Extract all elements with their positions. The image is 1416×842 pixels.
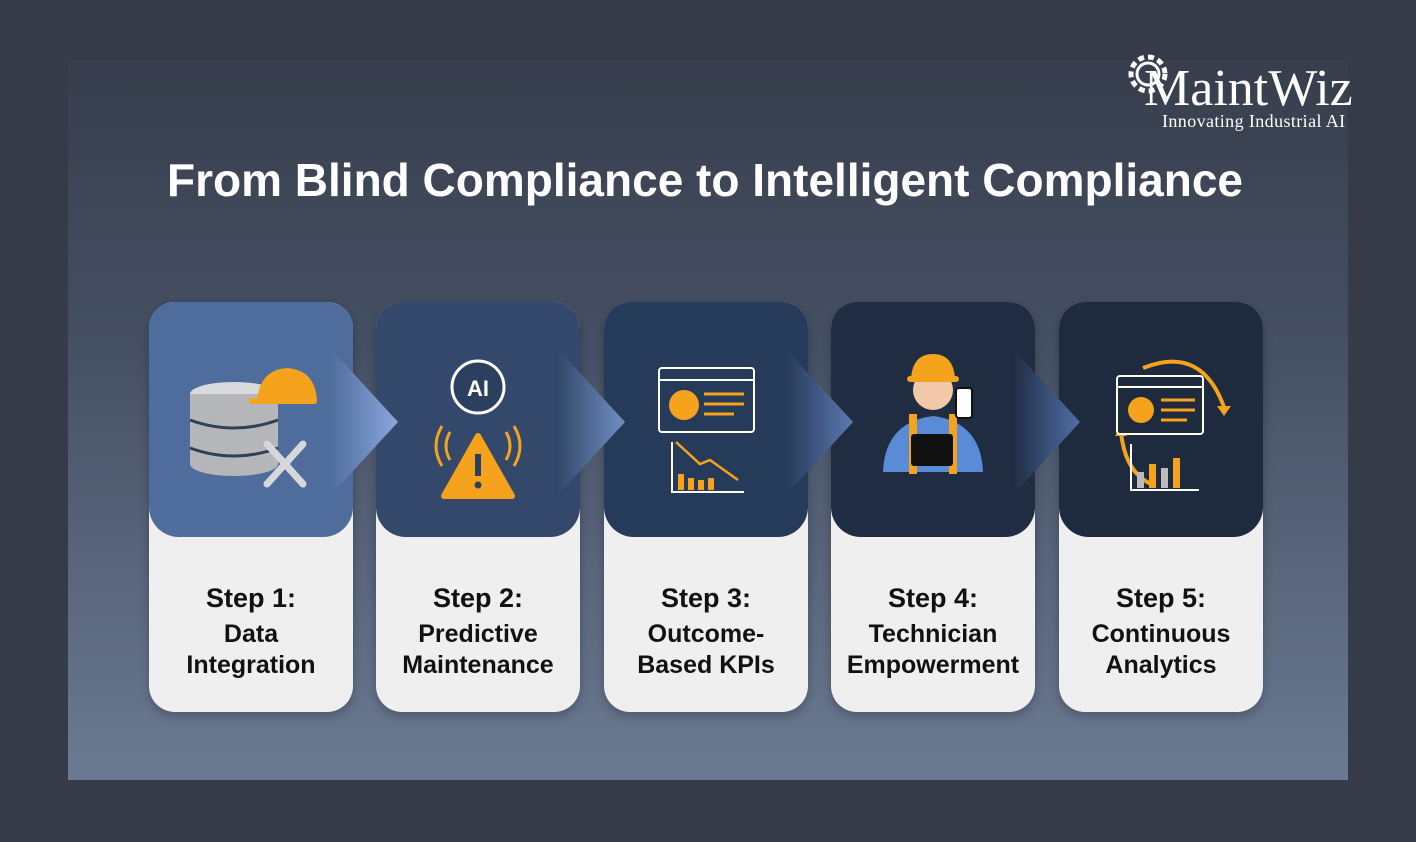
icon: AI brain with alert: AI (467, 376, 489, 401)
icon: continuous analytics cycle (1115, 360, 1231, 491)
step 4 text: Technician (869, 620, 997, 648)
step 5 text: Step 5: (1116, 583, 1206, 613)
step 4 text: Empowerment (847, 651, 1019, 679)
step 3 text: Step 3: (661, 583, 751, 613)
arrow 1 (338, 358, 398, 485)
step 3 text: Outcome- (648, 620, 764, 648)
step 4 text: Step 4: (888, 583, 978, 613)
icon: technician (883, 354, 983, 474)
step 5 text: Continuous (1092, 620, 1230, 648)
icon: dashboard and declining chart (658, 367, 755, 493)
step 3 text: Based KPIs (637, 651, 775, 679)
step 1 text: Step 1: (206, 583, 296, 613)
logo: Innovating Industrial AI (1162, 111, 1346, 131)
step 2 text: Predictive (418, 620, 538, 648)
step 2 text: Maintenance (402, 651, 554, 679)
background panel (68, 60, 1348, 780)
step 1 text: Integration (186, 651, 316, 679)
step 2 text (402, 583, 554, 679)
step 5 text: Analytics (1105, 651, 1217, 679)
step 5 text (1092, 583, 1230, 679)
step 1 text: Data (224, 620, 278, 648)
logo (1128, 54, 1353, 131)
card: step 4 (831, 302, 1035, 712)
step 2 text: Step 2: (433, 583, 523, 613)
icon: database with hard hat and tools (190, 368, 317, 488)
arrow 4 (1018, 355, 1080, 490)
step 1 text (186, 583, 316, 679)
card: step 5 (1059, 302, 1263, 712)
title: From Blind Compliance to Intelligent Compliance (167, 154, 1243, 206)
card: step 2 (376, 302, 580, 712)
logo: MaintWiz (1144, 60, 1353, 117)
arrow 2 (563, 356, 625, 488)
icon: AI brain with alert (434, 360, 522, 499)
arrow 3 (792, 356, 853, 488)
step 3 text (637, 583, 775, 679)
icon: gear (1128, 54, 1168, 94)
card: step 3 (604, 302, 808, 712)
step 4 text (847, 583, 1019, 679)
card: step 1 (149, 302, 353, 712)
